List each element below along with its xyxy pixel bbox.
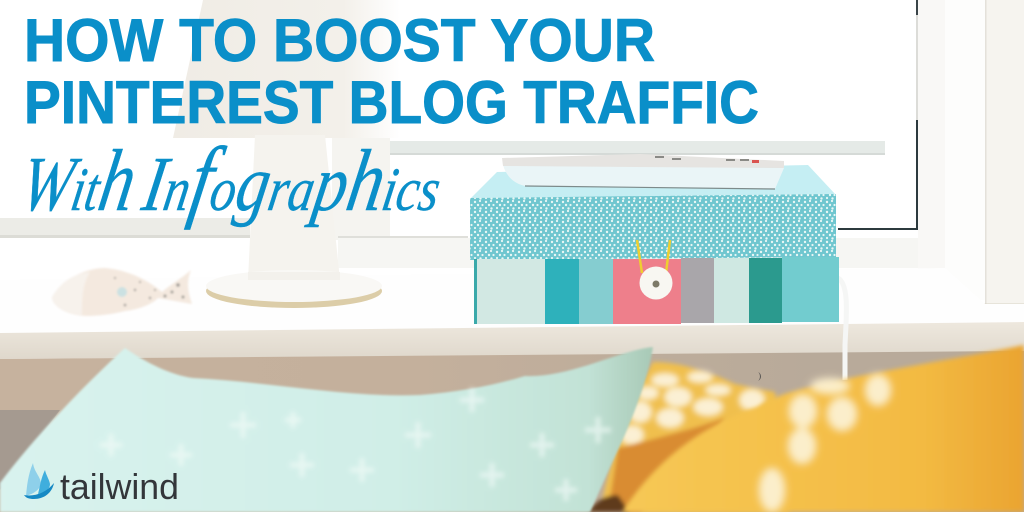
heading line 2: PINTEREST BLOG TRAFFIC <box>24 69 759 136</box>
cushion shadow <box>608 418 725 512</box>
remote control <box>502 154 784 189</box>
icon: tailwind sail <box>24 463 54 499</box>
lamp shade <box>173 0 400 138</box>
heading line 1: HOW TO BOOST YOUR <box>24 7 655 74</box>
box elastic loop <box>637 240 670 273</box>
pillow cross pattern <box>100 388 611 501</box>
wordmark: tailwind <box>60 466 179 507</box>
yellow patterned cushion <box>588 362 790 512</box>
lamp base <box>206 274 382 308</box>
window sill <box>0 268 1024 359</box>
box button <box>640 266 672 300</box>
heading <box>24 7 759 136</box>
tailwind logo <box>24 463 179 507</box>
power cable <box>838 278 846 380</box>
teal pillow <box>0 347 653 512</box>
patterned cushion dots <box>620 371 765 445</box>
yellow cushion <box>622 345 1024 512</box>
script subtitle <box>15 129 450 231</box>
script word: With: With <box>15 133 144 230</box>
lamp stem <box>248 135 340 280</box>
wall below sill <box>0 351 1024 512</box>
icon: ceramic fish <box>52 268 192 316</box>
script word: Infographics: Infographics <box>136 129 450 231</box>
box striped base <box>474 257 839 324</box>
cushion dots <box>759 374 891 512</box>
box: storage box <box>470 165 839 324</box>
box lid front <box>470 194 836 260</box>
box lid top <box>471 165 836 198</box>
lamp <box>173 0 400 308</box>
